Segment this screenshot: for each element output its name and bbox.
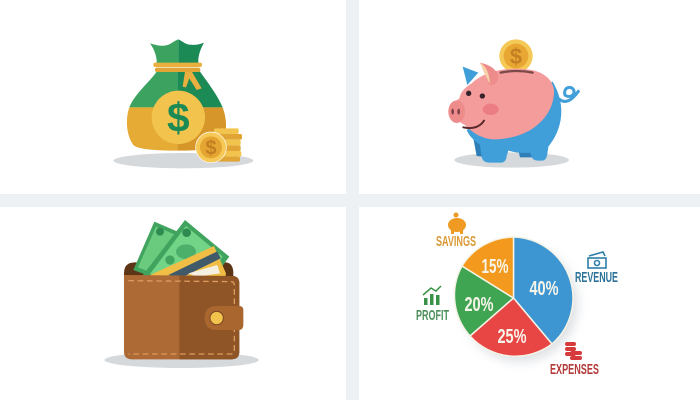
pig eyes — [466, 91, 485, 99]
bag coin with dollar: $ — [167, 94, 190, 140]
icon: red coins — [565, 342, 582, 360]
wallet clasp — [205, 306, 243, 330]
icon: banknotes — [588, 252, 606, 268]
pig ears — [463, 63, 498, 85]
pig smile — [463, 121, 484, 128]
pig shadow — [454, 152, 569, 168]
panel: money bag — [113, 39, 253, 168]
pig cheek — [483, 104, 499, 115]
falling coin: $ — [510, 44, 522, 69]
label: profit — [416, 286, 449, 324]
pig tail — [559, 87, 578, 101]
pie percentages: 15% — [482, 256, 509, 278]
bag body — [127, 39, 226, 151]
panel: piggy bank — [448, 39, 578, 168]
label: expenses: EXPENSES — [550, 361, 599, 378]
label: revenue: REVENUE — [575, 269, 618, 286]
label: profit: PROFIT — [416, 307, 449, 324]
label: savings: SAVINGS — [436, 233, 476, 250]
pig body blue — [467, 82, 561, 163]
label: revenue — [575, 252, 618, 286]
pie slices — [454, 237, 573, 356]
pie percentages: 40% — [530, 278, 559, 300]
bag shadow — [113, 153, 253, 168]
pie shadow — [462, 246, 578, 362]
coin stack: $ — [205, 138, 217, 160]
panel: pie chart — [416, 212, 618, 378]
panel: wallet — [104, 220, 259, 368]
pie percentages: 25% — [498, 326, 527, 348]
banknotes — [133, 220, 229, 280]
bank cards — [150, 246, 226, 278]
label: savings — [436, 212, 476, 250]
wallet back — [124, 262, 233, 290]
pig body pink — [453, 69, 554, 139]
pig snout — [448, 100, 465, 123]
label: expenses — [550, 342, 599, 378]
pie percentages: 20% — [464, 294, 494, 316]
wallet shadow — [104, 352, 259, 368]
bag tie — [153, 63, 202, 90]
pie percentages — [464, 256, 559, 348]
coin slot — [501, 71, 533, 73]
icon: savings piggy — [448, 212, 466, 234]
wallet front — [124, 275, 239, 359]
icon: growth chart — [423, 286, 441, 305]
